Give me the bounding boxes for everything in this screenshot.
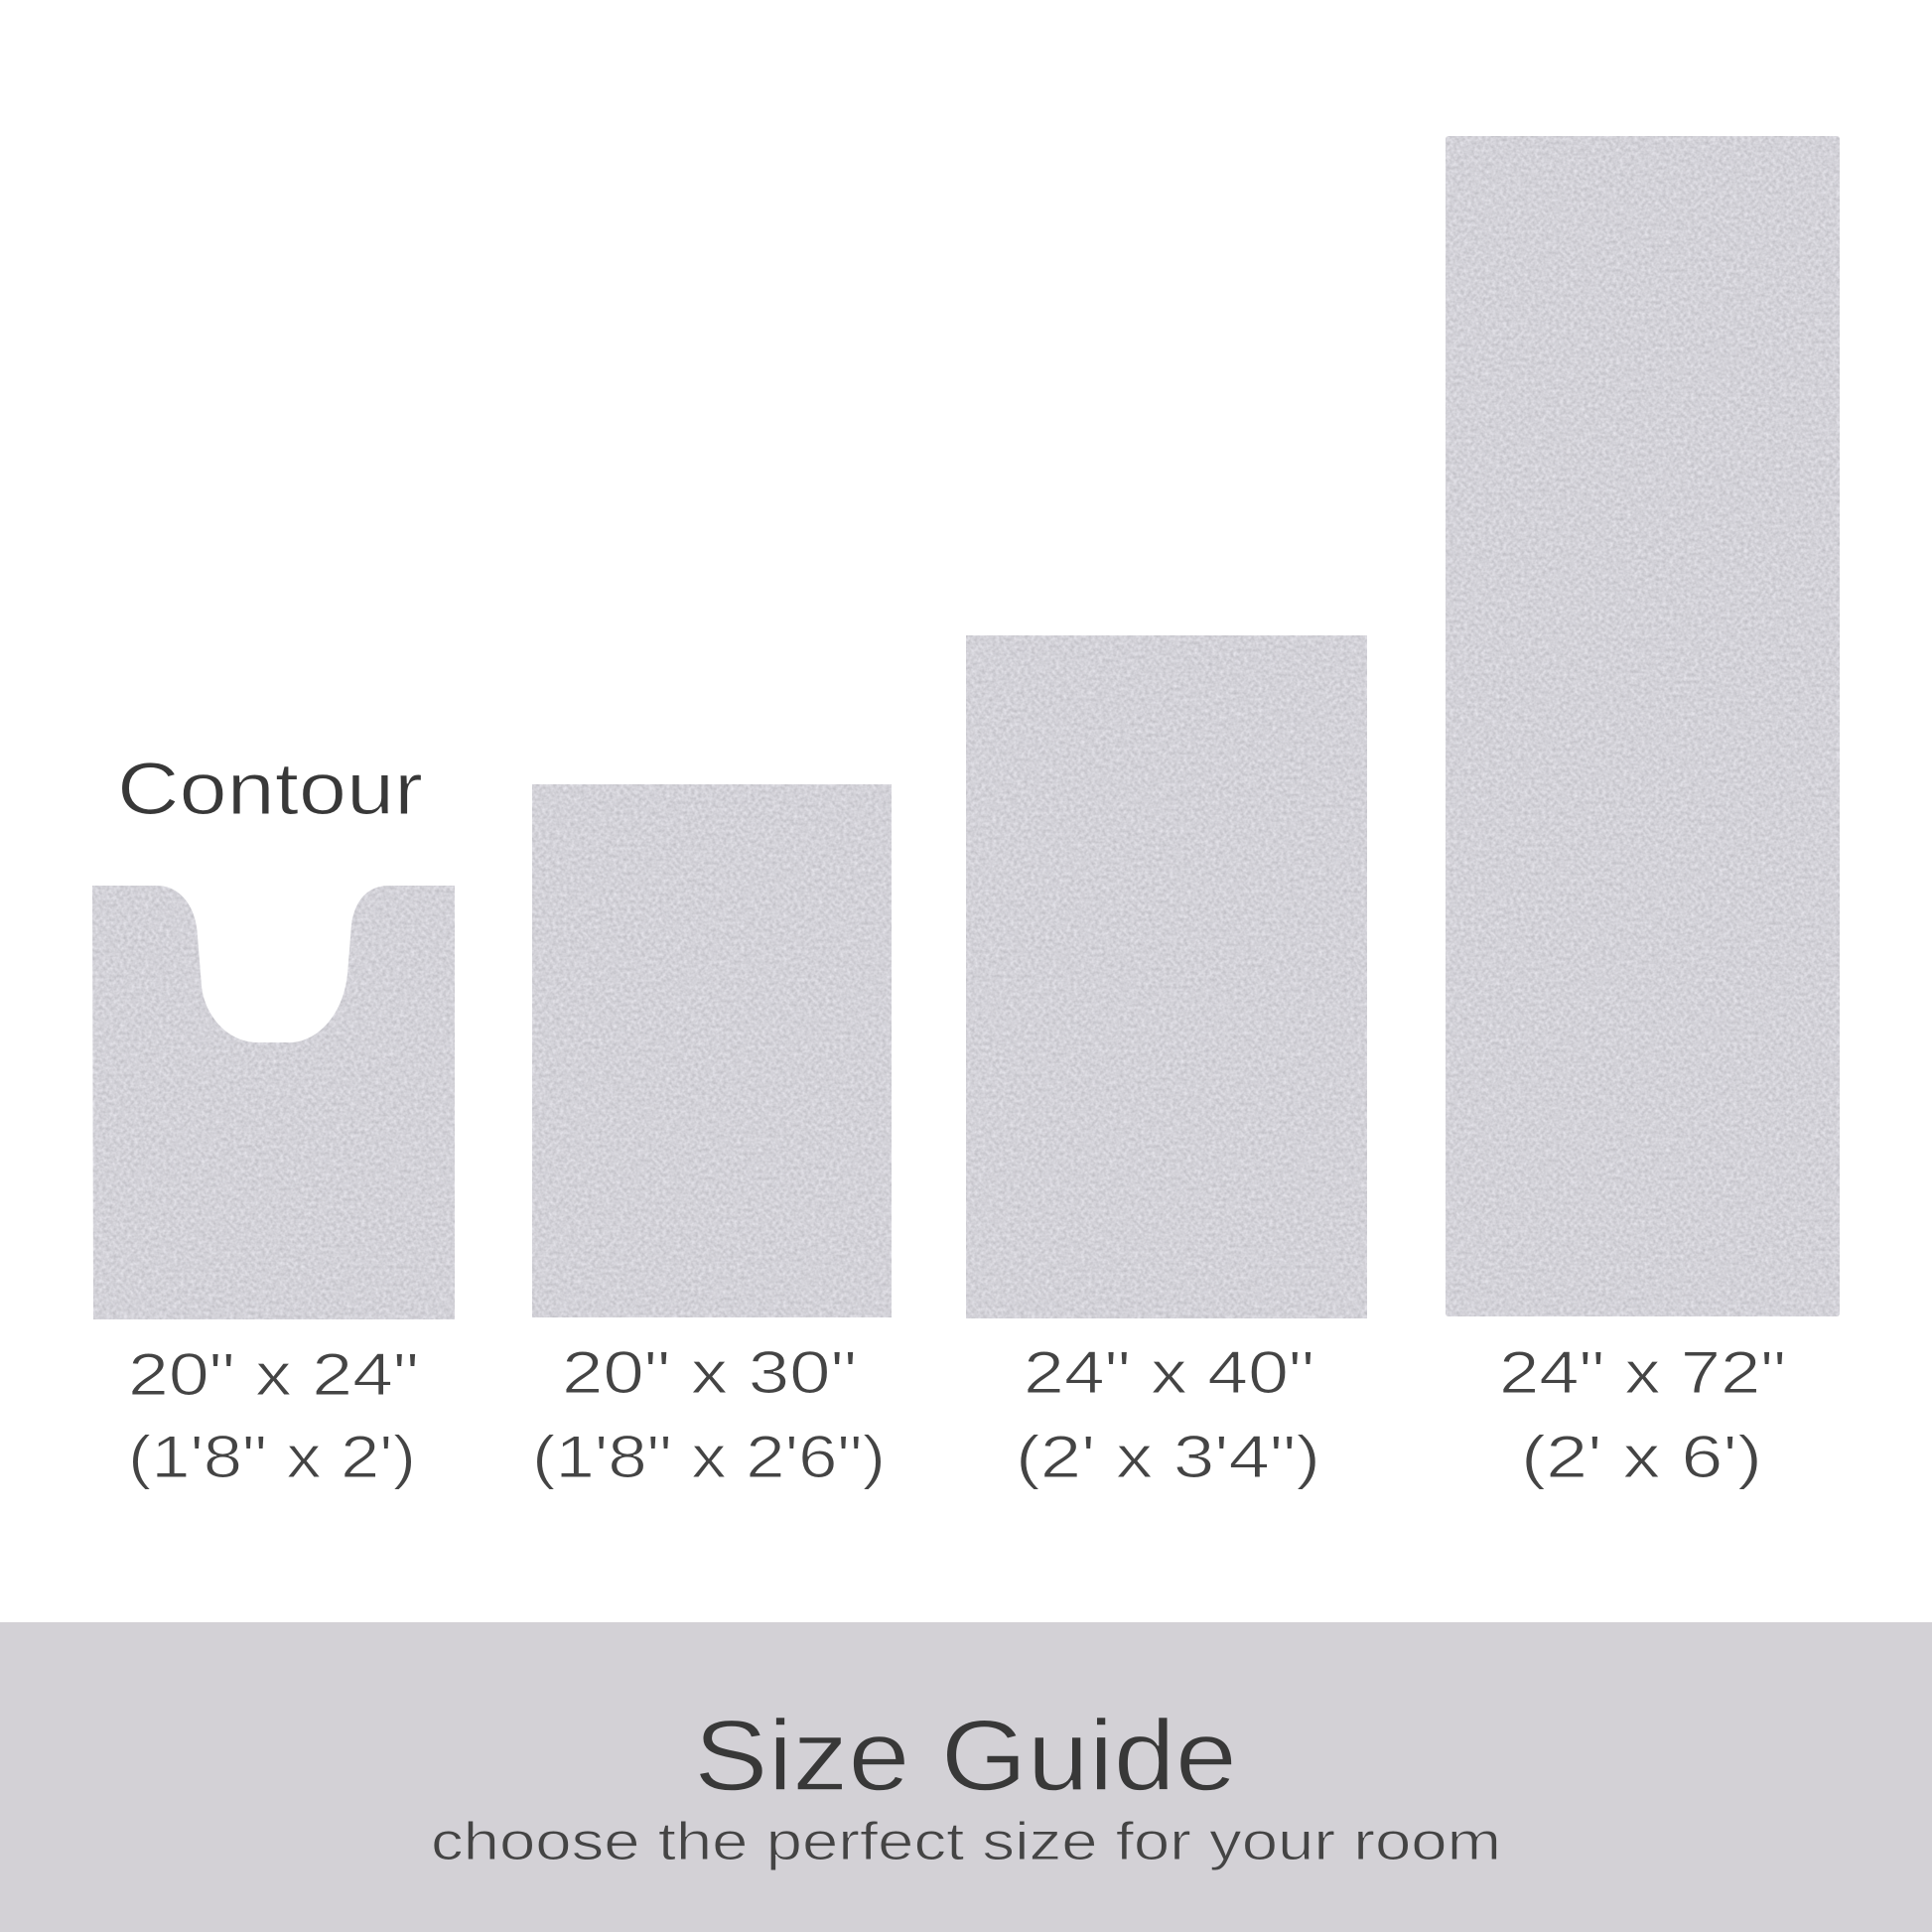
size label: 20 x 30 inches: 20" x 30" — [562, 1339, 857, 1406]
panel: mat 20 x 30 — [532, 784, 892, 1490]
size label: 1'8 x 2'6 feet: (1'8" x 2'6") — [532, 1424, 886, 1490]
size label: 1'8 x 2 feet: (1'8" x 2') — [128, 1424, 416, 1490]
size label: 24 x 72 inches: 24" x 72" — [1499, 1339, 1786, 1406]
subtitle: choose the perfect size for your room — [431, 1812, 1501, 1871]
mat rectangle 24 x 40 — [966, 635, 1367, 1318]
contour label: Contour — [117, 748, 423, 830]
title: Size Guide — [694, 1701, 1237, 1812]
panel: mat 24 x 72 — [1446, 136, 1840, 1490]
size label: 2 x 3'4 feet: (2' x 3'4") — [1016, 1424, 1320, 1490]
footer band — [0, 1622, 1932, 1932]
mat rectangle 24 x 72 — [1446, 136, 1840, 1316]
mat rectangle 20 x 30 — [532, 784, 892, 1317]
size label: 2 x 6 feet: (2' x 6') — [1521, 1424, 1762, 1490]
size label: 24 x 40 inches: 24" x 40" — [1024, 1339, 1314, 1406]
panel: contour mat 20 x 24 — [92, 748, 455, 1490]
contour mat shape — [92, 886, 455, 1319]
panel: mat 24 x 40 — [966, 635, 1367, 1490]
size label: 20 x 24 inches: 20" x 24" — [128, 1341, 419, 1408]
